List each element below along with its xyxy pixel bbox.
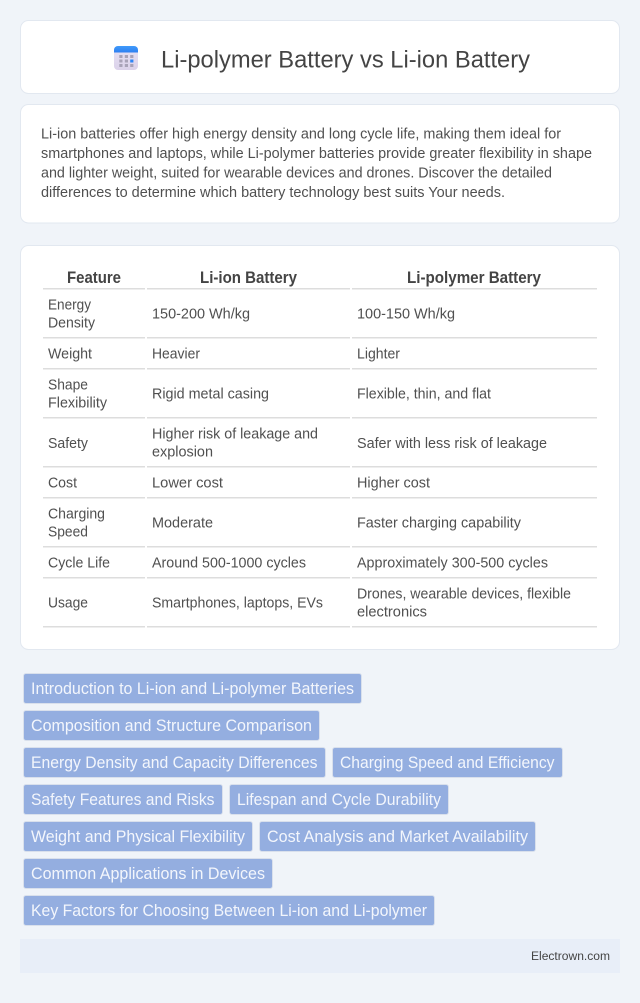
- title: Li-polymer Battery vs Li-ion Battery: [161, 46, 531, 73]
- row: safety: [43, 426, 597, 468]
- row: safety: Higher risk of leakage and: [152, 426, 318, 442]
- tag: applications: [24, 858, 272, 888]
- row: cycle life: [43, 556, 597, 578]
- row: energy density: [43, 298, 597, 338]
- tag: weight: [24, 822, 252, 852]
- tag: composition: Composition and Structure Comparison: [31, 717, 312, 735]
- tag: key factors: [24, 896, 434, 926]
- tag: lifespan: Lifespan and Cycle Durability: [237, 791, 442, 809]
- row: energy density: Energy: [48, 298, 92, 314]
- row: cost: Cost: [48, 476, 77, 492]
- tag: introduction: Introduction to Li-ion and Li-polymer Batteries: [31, 680, 354, 698]
- tag: cost: [260, 822, 536, 852]
- table header row: [43, 269, 597, 290]
- row: usage: Usage: [48, 596, 88, 612]
- row: cost: Lower cost: [152, 476, 223, 492]
- table header row: Li-polymer Battery: [407, 269, 542, 287]
- row: energy density: 150-200 Wh/kg: [152, 306, 250, 322]
- row: shape flexibility: [43, 378, 597, 418]
- intro paragraph: Li-ion batteries offer high energy density and long cycle life, making them ideal for: [41, 126, 561, 142]
- tag: energy density: Energy Density and Capacity Differences: [31, 754, 318, 772]
- row: shape flexibility: Flexibility: [48, 396, 108, 412]
- row: shape flexibility: Shape: [48, 378, 88, 394]
- row: usage: Smartphones, laptops, EVs: [152, 596, 323, 612]
- panel: header: [20, 20, 620, 94]
- tag: safety: [24, 784, 222, 814]
- tag: energy density: [24, 748, 326, 778]
- intro paragraph: smartphones and laptops, while Li-polymer batteries provide greater flexibility in shape: [41, 146, 592, 162]
- tag: charging speed: [332, 748, 562, 778]
- footer: Electrown.com: [531, 949, 610, 963]
- row: weight: [43, 346, 597, 370]
- row: safety: Safety: [48, 436, 89, 452]
- row: safety: Safer with less risk of leakage: [357, 436, 547, 452]
- row: usage: electronics: [357, 604, 427, 620]
- tag: safety: Safety Features and Risks: [31, 791, 214, 809]
- row: safety: explosion: [152, 444, 213, 460]
- row: charging speed: Faster charging capability: [357, 516, 522, 532]
- tag: weight: Weight and Physical Flexibility: [31, 828, 246, 846]
- panel: intro text: [20, 104, 620, 223]
- row: usage: [43, 586, 597, 628]
- tag: lifespan: [230, 784, 448, 814]
- topic tags: [24, 674, 562, 926]
- tag: charging speed: Charging Speed and Efficiency: [340, 754, 555, 772]
- tag: applications: Common Applications in Devices: [31, 865, 265, 883]
- panel: comparison table: [20, 246, 620, 650]
- row: cycle life: Approximately 300-500 cycles: [357, 556, 548, 572]
- row: usage: Drones, wearable devices, flexible: [357, 586, 571, 602]
- row: weight: Lighter: [357, 346, 400, 362]
- row: cost: [43, 476, 597, 498]
- tag: cost: Cost Analysis and Market Availability: [267, 828, 529, 846]
- row: shape flexibility: Flexible, thin, and flat: [357, 386, 491, 402]
- tag: key factors: Key Factors for Choosing Between Li-ion and Li-polymer: [31, 902, 428, 920]
- footer: [20, 939, 620, 973]
- row: energy density: Density: [48, 316, 96, 332]
- row: shape flexibility: Rigid metal casing: [152, 386, 269, 402]
- intro paragraph: differences to determine which battery technology best suits Your needs.: [41, 185, 505, 201]
- row: energy density: 100-150 Wh/kg: [357, 306, 455, 322]
- intro paragraph: [41, 126, 592, 201]
- row: charging speed: Charging: [48, 506, 105, 522]
- table header row: Feature: [67, 269, 121, 287]
- row: cycle life: Cycle Life: [48, 556, 110, 572]
- row: cost: Higher cost: [357, 476, 430, 492]
- tag: introduction: [24, 674, 362, 704]
- row: charging speed: Speed: [48, 524, 88, 540]
- row: charging speed: [43, 506, 597, 548]
- row: weight: Weight: [48, 346, 92, 362]
- tag: composition: [24, 710, 320, 740]
- table header row: Li-ion Battery: [200, 269, 298, 287]
- row: charging speed: Moderate: [152, 516, 213, 532]
- row: weight: Heavier: [152, 346, 200, 362]
- intro paragraph: and lighter weight, suited for wearable devices and drones. Discover the detailed: [41, 166, 552, 182]
- icon: calendar: [114, 46, 138, 70]
- row: cycle life: Around 500-1000 cycles: [152, 556, 306, 572]
